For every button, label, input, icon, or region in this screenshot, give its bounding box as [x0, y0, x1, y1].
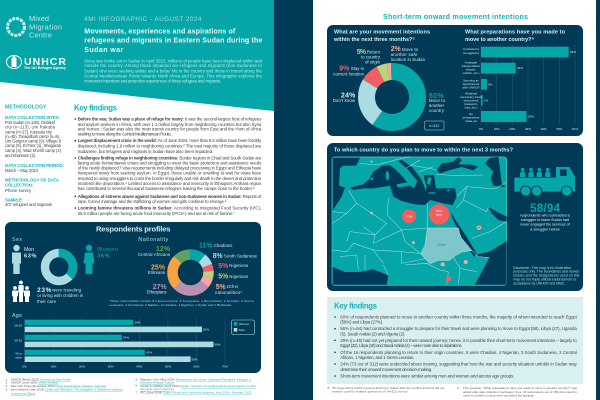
references left: 5.	[136, 377, 138, 381]
bar chart: preparations: documents	[464, 98, 479, 102]
panel: key findings right	[327, 297, 583, 384]
nationality labels: South Sudanese	[224, 254, 258, 258]
main title: Movements, experiences and aspirations of	[84, 27, 236, 35]
logo: Mixed Migration Centre	[8, 14, 62, 40]
bar chart: preparations: with UNHCR	[462, 86, 480, 90]
age bar chart: 60%	[193, 364, 200, 368]
donut labels: to country	[361, 55, 381, 60]
references left: 7.	[136, 390, 138, 394]
bar chart: preparations: made yet	[465, 119, 477, 123]
donut labels: of origin	[365, 60, 381, 64]
finding: neighboring countries: facing acute humanitarian crises and struggling to meet the basic protection and assistance needs	[78, 160, 262, 166]
footnotes right: 95 respondents (23%) reported arriving in Sudan after the conflict and thus did not	[332, 386, 444, 390]
references left: demands urgent response	[140, 387, 174, 391]
finding: place of refuge: and Yemen.¹ Sudan was also the main transit country for people from East and the Horn of Africa	[78, 126, 262, 132]
nationality labels: Other	[227, 284, 239, 289]
finding: displacement crisis	[74, 138, 262, 154]
finding: neighboring countries: resorted to using smugglers to cross the border irregularly and risk death in the desert and protection	[78, 176, 262, 181]
sex breakdown: 63%	[24, 253, 37, 259]
bar chart: preparations: Securing an	[463, 78, 479, 82]
age bar chart: 20%	[79, 364, 85, 368]
map disclaimer: Disclaimer: This map is for illustration	[513, 266, 571, 270]
references left: 6.	[136, 384, 138, 388]
references left: New York Times (November 2023) Chad: Humanitarian Situation Overview	[11, 384, 107, 388]
intro paragraph: Sudan) who were seeking safety and a better life in the country and those in transit along the	[84, 68, 263, 73]
footnotes right: added after data collection had begun; thus, 19 respondents out of 189 who intend to	[463, 390, 577, 394]
finding: abuse against women	[74, 194, 262, 204]
logo: UNHCR	[6, 56, 66, 70]
donut labels: Don't know	[333, 98, 356, 103]
finding: abuse against women: rape, forced marriage and the trafficking of women and girls continue to emerge.⁶	[78, 199, 227, 204]
findings list: African, 1 Nigerien, and 1 Sierra Leonian.	[340, 355, 414, 360]
panel heading: Respondents profiles	[96, 224, 170, 233]
panel: key findings right: Key findings	[334, 302, 378, 311]
age legend	[232, 320, 254, 334]
sample size badge: n=312	[429, 124, 439, 128]
intro paragraph	[84, 58, 263, 84]
donut labels: current location	[333, 71, 365, 76]
panel: respondents profiles	[5, 222, 261, 373]
map disclaimer: map do not imply official endorsement or	[513, 277, 577, 281]
donut labels: another safe	[391, 52, 418, 57]
age legend: Men	[239, 328, 245, 332]
nationality breakdown: Nationality	[138, 237, 169, 243]
findings list: Short-term movement intentions were similar among men and women and across age groups.	[340, 374, 514, 378]
findings list: 56% (n=94) had contracted a smuggler to prepare for their travel and were planning to move to Egypt (58), Libya (27), Uganda	[340, 326, 577, 331]
map of destinations: Sudan	[437, 242, 446, 246]
nationality labels: 11%	[199, 242, 212, 250]
footnotes right: This question: "What preparations have you made to move to another country?" was	[463, 386, 578, 390]
donut labels: another	[429, 103, 445, 108]
finding: displacement crisis: Sudanese, but refugees and migrants in Sudan have also been impacted.	[78, 149, 213, 154]
nationality labels: Chadians	[214, 243, 232, 248]
bubble: Libya: Libya	[406, 207, 412, 209]
bar chart: preparations: 0%	[479, 127, 483, 131]
finding: neighboring countries: hampered many from seeking asylum. In Egypt, those unable or unwilling to wait for visas have	[78, 170, 262, 176]
intro paragraph: movement intentions and protection experiences of these refugees and migrants.	[84, 79, 221, 84]
methodology sidebar: 407 refugees and migrants	[5, 202, 52, 207]
methodology sidebar: and Khartoum (2).	[5, 153, 36, 158]
finding: neighboring countries	[74, 156, 262, 191]
smuggler statistic: a smuggler before	[530, 227, 560, 231]
map of destinations	[332, 157, 507, 285]
bar chart question: move to another country?⁶	[465, 37, 534, 43]
sex breakdown: Women	[97, 247, 118, 253]
age bar chart: older	[15, 356, 22, 360]
nationality breakdown	[109, 237, 258, 307]
donut labels: Move to	[429, 98, 446, 103]
age bar chart: 18-29	[14, 324, 22, 328]
bar chart: preparations: vehicle, etc.)	[463, 71, 479, 75]
finding: abuse against women: Allegations of extreme abuse against Sudanese and non-Sudanese women in Sudan: Reports of	[78, 194, 262, 199]
bar chart: preparations: Contacted a	[463, 47, 479, 51]
age bar chart: 42%	[146, 350, 152, 354]
children statistic	[37, 287, 84, 304]
age bar chart: 10%	[50, 364, 57, 368]
map disclaimer: shown, and the designations used on this	[513, 273, 580, 277]
bar chart: preparations	[460, 45, 578, 131]
references left: 3.	[6, 384, 8, 388]
age bars	[25, 320, 214, 362]
methodology sidebar: DATA COLLECTION SITES:	[5, 115, 61, 120]
logo: UNHCR: UNHCR	[24, 56, 66, 68]
findings list: 60% of respondents planned to move to another country within three months, the majority of whom intended to reach Egypt	[340, 314, 578, 320]
header banner	[0, 0, 274, 111]
nationality labels: 5%	[218, 274, 228, 280]
bar chart: preparations: smuggler(s)	[463, 51, 479, 55]
bar chart: preparations: 50%	[556, 127, 563, 131]
bar chart: preparations: necessary travel	[460, 95, 482, 99]
donut labels: 9%	[339, 66, 349, 72]
age bar chart	[12, 313, 254, 368]
findings list: 24% (73 out of 312) were undecided about moving, suggesting that how the war and security situation unfolds in Sudan may	[340, 362, 578, 366]
children statistic: were traveling	[52, 288, 82, 293]
nationality footnote: *Other nationalities include 8 Cameroonians, 6 Congolese, 4 Burundians, 2 Somalis, 2 Sierra	[109, 299, 254, 303]
donut labels: 5%	[357, 49, 366, 56]
references left: IPC (June 2024) Sudan: Acute food insecurity snapshot June 2024 - February 2025	[140, 391, 252, 395]
methodology sidebar: (n=45), Tanaydbah camp (n=9),	[5, 134, 60, 139]
footnotes right: 8.	[328, 386, 330, 390]
finding: place of refuge: Before the war, Sudan was a place of refuge for many: It was the second-largest host of refugees	[78, 116, 262, 122]
age bar chart: 30-39	[14, 338, 22, 342]
logo: Mixed Migration Centre: Mixed	[29, 14, 49, 23]
footnotes right: move to another country were not asked the question.	[463, 394, 535, 398]
finding: famine: Looming famine threatens millions in Sudan: According to Integrated Food Security (IPC),	[78, 206, 261, 210]
smuggler statistic	[520, 203, 571, 231]
bar chart: preparations: 22%	[517, 66, 523, 70]
finding: place of refuge: and asylum seekers in Africa, with over 1.1 million largely from neighboring countries but also Syria	[78, 122, 262, 127]
age bar chart: 30%	[108, 364, 114, 368]
methodology sidebar: METHODOLOGY OF DATA	[5, 178, 60, 183]
findings list: 29% (n=49) had not yet prepared for their onward journey; hence, it is possible their short-term movement intentions – largely to	[340, 338, 577, 343]
finding: neighboring countries: has contributed to several thousand Sudanese refugees leaving the camps close to the border.⁵	[78, 186, 255, 191]
children statistic: their care	[37, 299, 57, 304]
donut chart question: within the next three months?⁵	[333, 37, 415, 43]
map question: To which country do you plan to move to within the next 3 months?	[334, 148, 513, 154]
icon: family	[12, 281, 30, 302]
logo: Mixed Migration Centre: Centre	[29, 30, 52, 40]
map disclaimer: purposes only. The boundaries and names	[513, 270, 580, 274]
smuggler statistic: respondents who contracted a	[520, 213, 571, 217]
smuggler statistic: never engaged the services of	[520, 223, 571, 227]
bar chart: preparations: 56%	[570, 50, 576, 54]
methodology sidebar: camp (3), Wad Sherifi camp (2)	[5, 148, 62, 153]
donut labels: Stay in	[351, 66, 365, 71]
methodology sidebar: DATA COLLECTION PERIOD:	[5, 163, 65, 168]
bar chart question: What preparations have you made to	[465, 30, 566, 36]
icon: truck with people	[514, 167, 575, 198]
nationality labels: Nigeriens	[229, 263, 248, 268]
panel: destination map	[327, 143, 583, 291]
nationality labels: Nigerians	[229, 274, 248, 279]
donut: sex	[45, 253, 73, 281]
nationality labels: 5%	[218, 263, 228, 270]
donut: nationality	[172, 254, 208, 290]
donut labels: 2%	[391, 46, 401, 53]
Sudan highlighted	[421, 228, 472, 264]
bar chart: preparations: Arranged	[465, 60, 478, 64]
age bar chart: 0%	[23, 364, 27, 368]
age bar chart: 34%	[123, 336, 129, 340]
sex breakdown: Sex	[12, 237, 22, 243]
panel: movement intentions charts	[327, 25, 583, 136]
findings list: determine their onward movement decision-making.	[340, 367, 432, 372]
map disclaimer: acceptance by UNHCR and MMC.	[513, 281, 565, 285]
finding: place of refuge: seeking to move along the Central Mediterranean Route.	[78, 132, 172, 136]
smuggler statistic: 58/94	[530, 203, 561, 215]
findings list: (5), Saudi Arabia (2) and Algeria (2).	[340, 332, 405, 336]
bar chart: preparations: 10%	[494, 127, 500, 131]
donut chart question	[333, 29, 430, 43]
bubble: Egypt: Egypt	[436, 210, 442, 213]
nationality labels: Central Africans	[138, 252, 170, 257]
bar chart: preparations: 1%	[484, 98, 489, 102]
nationality labels: nationalities*	[215, 290, 242, 295]
bar chart: preparations: visa, etc.)	[465, 106, 477, 110]
main title: refugees and migrants in Eastern Sudan during the	[84, 36, 262, 44]
references left: Migration Info (May 2024) Desperation and Hope: Sudanese Refugees' Struggle in	[140, 377, 252, 381]
bubble: Saudi Arabia	[477, 225, 481, 230]
bubble: Libya: 27%	[406, 215, 412, 219]
nationality labels	[138, 242, 258, 295]
bar chart: preparations: preparations	[463, 116, 480, 120]
logo: UNHCR: The UN Refugee Agency	[24, 66, 66, 70]
age bar chart: 38%	[134, 320, 141, 324]
age bar chart: 70%	[222, 364, 228, 368]
finding: displacement crisis: Largest displacement crisis in the world: As of June 2024, more than 9.2 million have been forcibly	[78, 138, 262, 143]
finding: neighboring countries: incidents like deportation.⁴ Limited access to assistance and insecurity in Ethiopia's Amhara region	[78, 181, 262, 186]
references left: Ayin Network (July 2024) Death and detention: The struggles of Sudanese migrants	[11, 387, 123, 391]
bar chart: preparations: 29%	[528, 114, 534, 118]
finding: famine	[74, 206, 261, 216]
references left: 4.	[6, 387, 8, 391]
sample size badge	[425, 121, 444, 130]
bar chart: preparations: 4%	[488, 82, 493, 86]
methodology sidebar: COLLECTION:	[5, 183, 34, 188]
children statistic: or living with children in	[37, 293, 84, 298]
footnotes right: answer conflict-related questions on N=312 survey.	[332, 390, 408, 394]
references left	[6, 377, 256, 396]
bar chart: preparations: Obtained	[465, 92, 477, 96]
methodology sidebar	[5, 105, 65, 207]
references left: UNHCR (March 2023) Operational Data Portal	[11, 377, 70, 381]
donut chart question: What are your movement intentions	[334, 29, 430, 35]
sex breakdown	[12, 237, 118, 304]
main title: Sudan war	[84, 46, 124, 54]
finding: famine: 25.6 million people are facing acute food insecurity (IPC3+) and are at risk of famine.⁷	[78, 211, 235, 216]
methodology sidebar: Um Gargour camp (9), Village 8	[5, 138, 62, 144]
nationality labels: Eritreans	[148, 270, 165, 275]
nationality footnote: Leoneans, 2 Comorians, 2 Malians, 2 Liberians, 1 Egyptian, 1 Syrian and 1 Burkinabe.	[109, 303, 232, 307]
age bar chart: 50%	[165, 364, 171, 368]
finding: neighboring countries: of the newly displaced.³ Visa requirements including delayed processing in Egypt and Ethiopia have	[78, 166, 262, 170]
intro paragraph: outside the country. Among those impacted are refugees and migrants (non-Sudanese in	[84, 63, 263, 68]
methodology sidebar: camp (9), El Fasr (1), Shagarab	[5, 143, 62, 148]
bubble: Libya	[402, 207, 416, 223]
methodology sidebar: March – May 2024	[5, 168, 39, 173]
donut: movement intentions	[366, 72, 418, 122]
age legend: Women	[239, 322, 250, 326]
icon: man	[12, 245, 21, 274]
methodology sidebar: Phone survey	[5, 188, 32, 193]
key findings left: Key findings	[74, 104, 118, 112]
methodology sidebar: SAMPLE:	[5, 197, 24, 202]
references left: 2.	[6, 380, 8, 384]
donut labels: Move to	[402, 47, 419, 52]
logo: Mixed Migration Centre: Migration	[29, 22, 62, 32]
bar chart: preparations: appointment	[463, 82, 479, 86]
finding: place of refuge	[74, 116, 262, 136]
age bar chart: 66%	[214, 342, 221, 346]
findings list: Egypt (32), Libya (10) and Saudi Arabia (4) – were more akin to aspirations.	[340, 343, 462, 348]
bar chart question	[465, 30, 566, 43]
bar chart: preparations: 40%	[541, 127, 547, 131]
nationality labels: 27%	[153, 284, 167, 291]
islands	[369, 171, 451, 194]
key findings left	[74, 104, 262, 216]
nationality labels: Ethiopians	[147, 290, 167, 294]
nationality labels: 25%	[151, 264, 165, 272]
age bar chart: 40%	[136, 364, 143, 368]
bar chart: preparations: 20%	[509, 127, 516, 131]
findings list	[334, 314, 578, 378]
sex breakdown: Men	[24, 247, 34, 253]
finding: neighboring countries: Challenges finding refuge in neighboring countries: Border regions in Chad and South Sudan are	[78, 156, 262, 160]
bar chart: preparations: 30%	[525, 127, 531, 131]
nationality labels: 5%	[216, 284, 226, 291]
methodology sidebar: city (n=113), Um Rakuba	[5, 124, 56, 130]
findings list: (59%) and Libya (27%).	[340, 320, 383, 324]
references left: Ethiopian Refugee Camps	[140, 380, 175, 384]
header kicker: 4MI INFOGRAPHIC - AUGUST 2024	[84, 16, 202, 23]
finding: displacement crisis: displaced, including 1.9 million to neighboring countries.² The vast majority of those displaced are	[78, 144, 262, 148]
icon: woman	[84, 245, 94, 274]
footnotes right: 9.	[457, 386, 460, 390]
references left: OCHA & OSRSG (April 2024) Sudan: Scourge of sexual violence amid ongoing conflict	[140, 384, 256, 388]
smuggler statistic: smuggler to leave Sudan had	[521, 218, 569, 222]
bar chart: preparations: No	[469, 112, 473, 116]
nationality footnote	[109, 299, 254, 307]
findings list: Of the 16 respondents planning to return to their origin countries, 5 were Chadian, 4 Nigerian, 3 South Sudanese, 2 Central	[340, 350, 577, 355]
donut labels: 24%	[341, 92, 355, 99]
bar chart: preparations: transportation	[462, 64, 480, 68]
methodology sidebar: Port Sudan (n=139), Gedaref	[5, 120, 56, 125]
age bar chart: 62%	[203, 328, 209, 332]
sex breakdown: 36%	[97, 253, 110, 259]
references left: UNHCR (June 2024) Sudan situation	[11, 380, 59, 384]
section heading: short-term intentions: Short-term onward movement intentions	[383, 13, 528, 21]
donut labels: location in Sudan	[391, 57, 426, 62]
age bar chart: 40 or	[15, 352, 22, 356]
main title	[84, 27, 262, 54]
age bar chart: Age	[12, 313, 22, 319]
bar chart: preparations: (buses,	[466, 68, 476, 72]
references left: crossing into Egypt	[11, 392, 35, 396]
footnotes right	[328, 386, 578, 398]
bar chart: preparations: (passport,	[464, 102, 478, 106]
age bar chart: 58%	[192, 358, 198, 362]
intro paragraph: Central Mediterranean Route towards North Africa and Europe. This infographic explores the	[84, 73, 263, 78]
donut labels: country	[429, 108, 445, 113]
methodology sidebar: METHODOLOGY	[5, 105, 47, 111]
map disclaimer	[513, 266, 580, 285]
methodology sidebar: camp (n=27), Kassala city	[5, 130, 53, 134]
donut labels	[333, 46, 446, 113]
bubble: Egypt	[429, 204, 449, 225]
bar chart: preparations: 60%	[572, 127, 578, 131]
children statistic: 23%	[37, 287, 52, 294]
bubble: Egypt: 59%	[436, 213, 442, 217]
donut labels: 60%	[429, 93, 444, 100]
references left: 1.	[6, 377, 8, 381]
nationality labels: 12%	[156, 246, 170, 253]
donut labels: Return	[367, 49, 381, 54]
intro paragraph: Since war broke out in Sudan in April 2023, millions of people have been displaced within and	[84, 58, 263, 63]
small bubbles	[370, 161, 468, 281]
nationality labels: 8%	[213, 253, 223, 260]
